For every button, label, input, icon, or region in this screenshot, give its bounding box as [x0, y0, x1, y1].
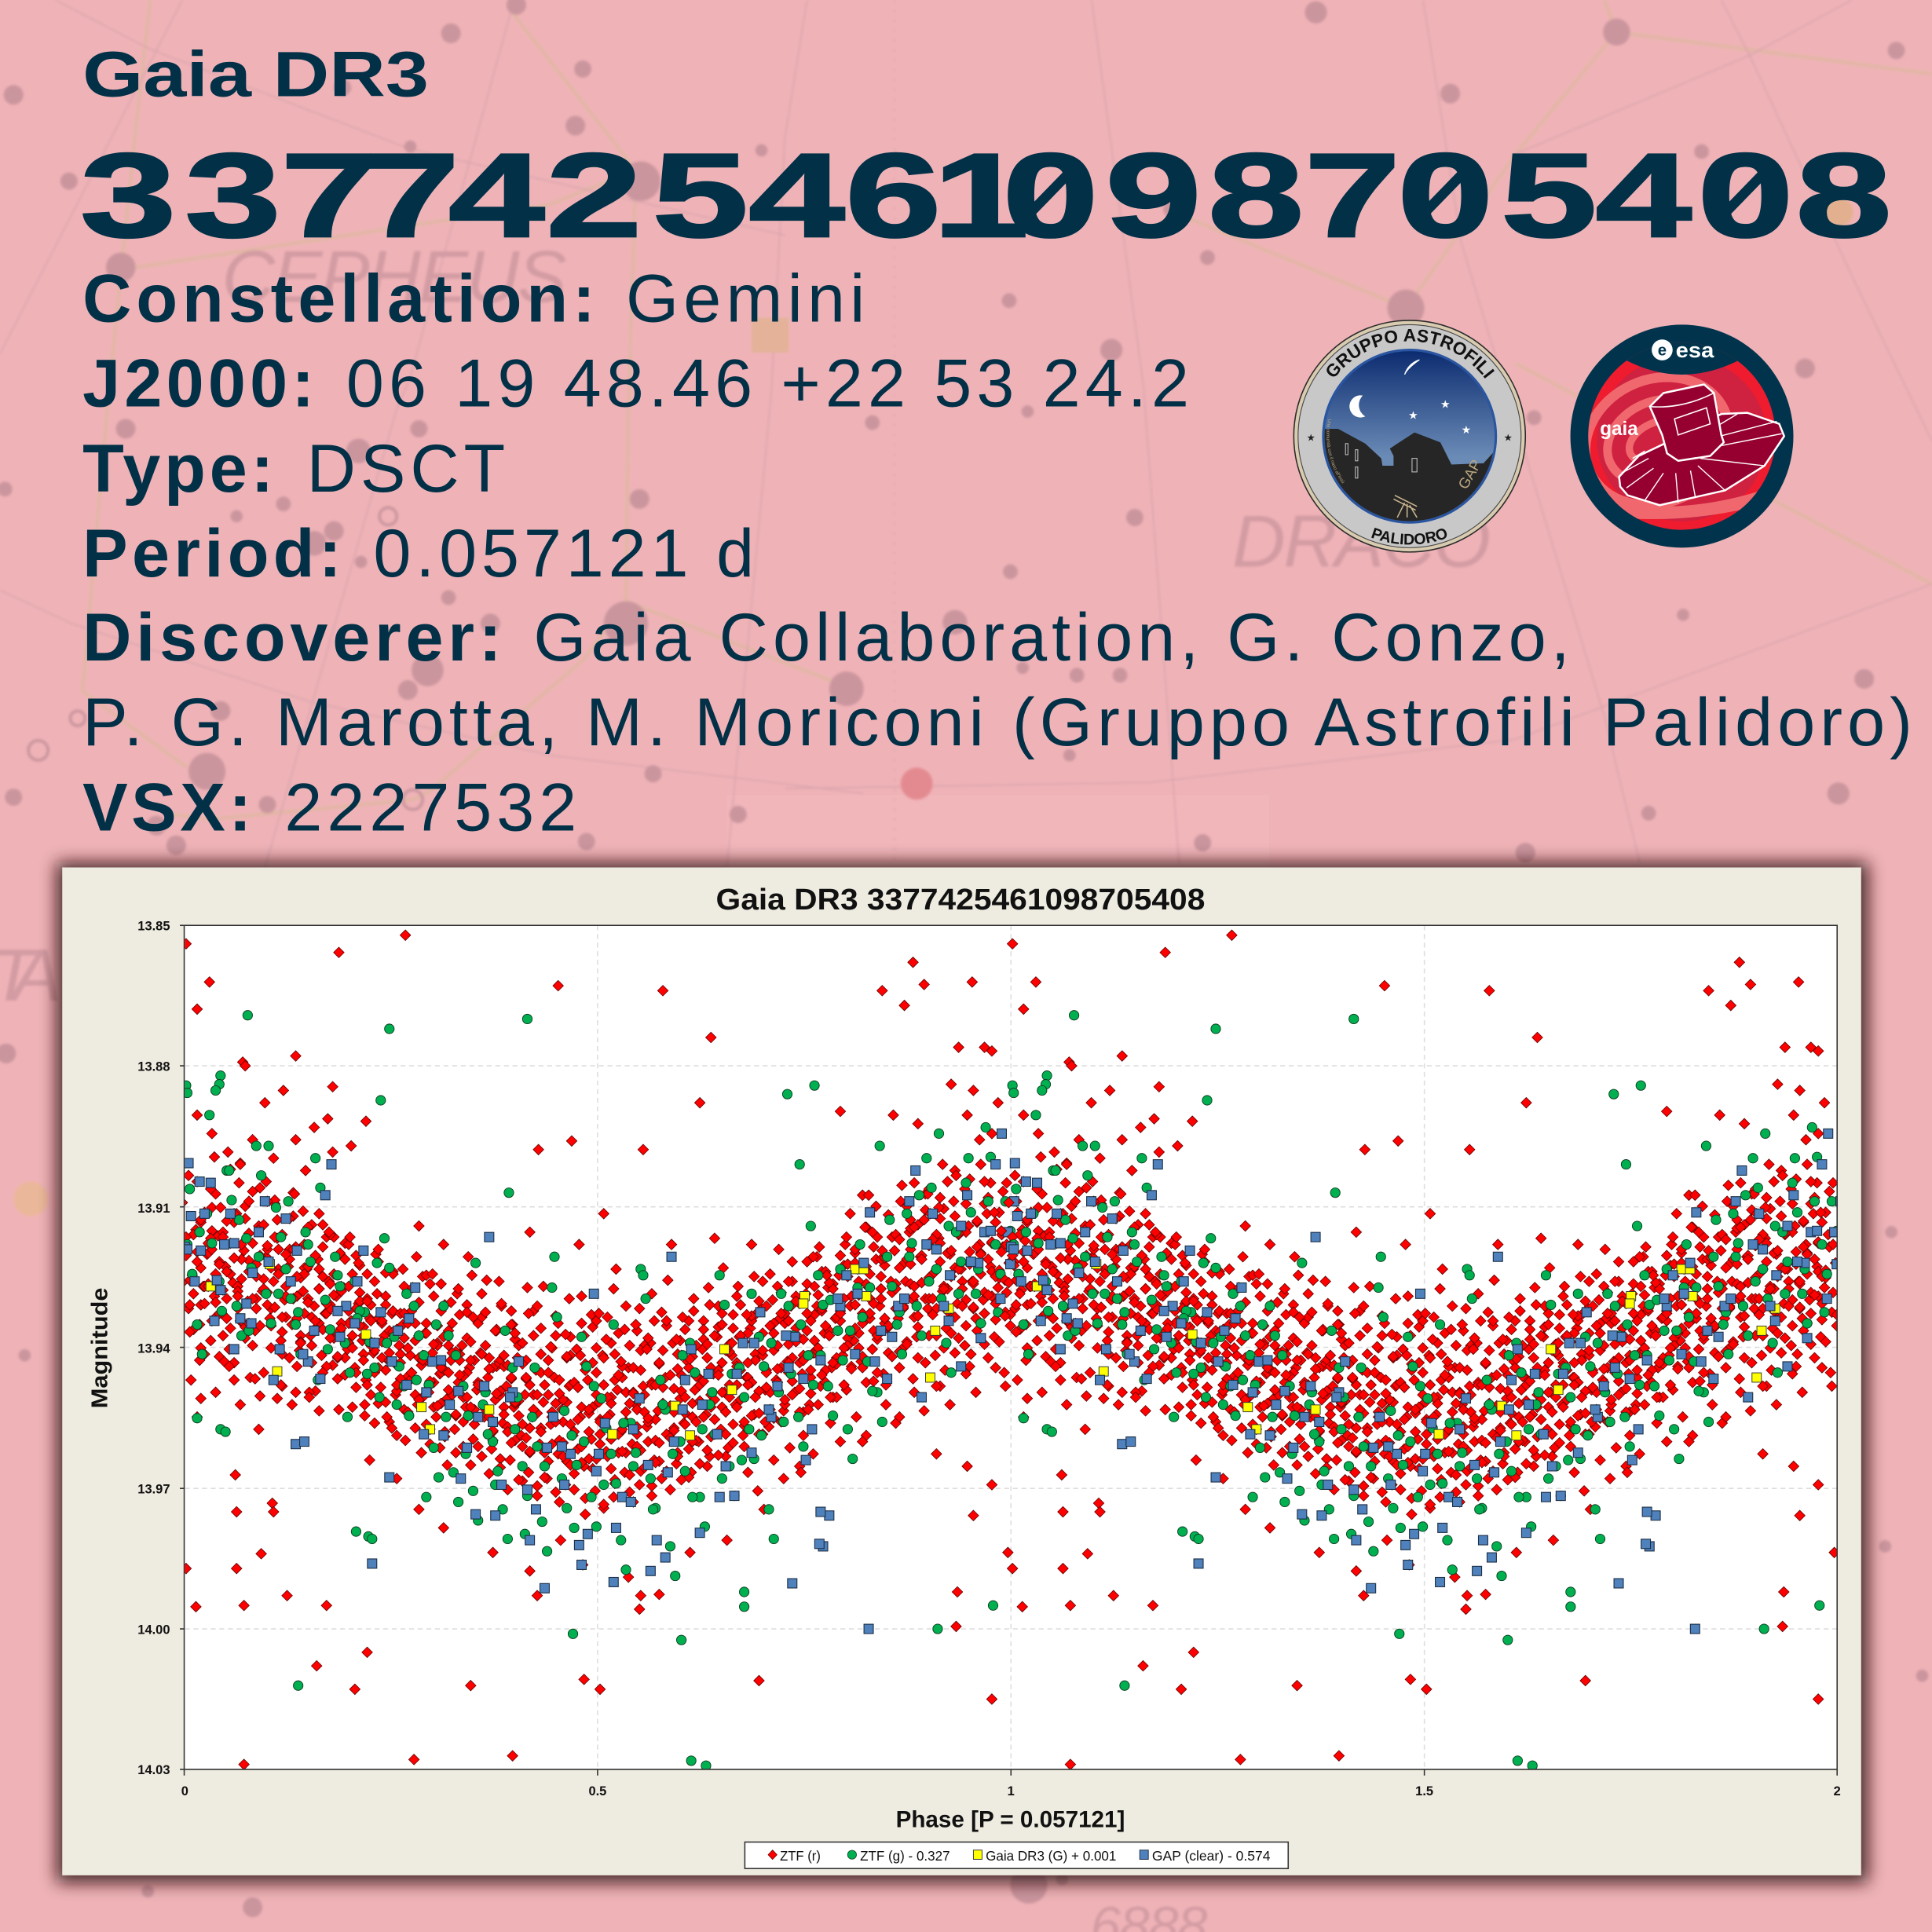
background: star chart: DRACO [1232, 500, 1491, 583]
panel: chart shadow [57, 862, 1868, 1883]
x axis labels: 0.5 [588, 1784, 606, 1798]
text: constellation: Gemini [626, 261, 865, 336]
text: J2000: J2000: [82, 346, 314, 422]
panel: phase plot chart [62, 867, 1861, 1875]
legend: Gaia DR3 (G) + 0.001 [986, 1848, 1116, 1864]
logo: Gruppo Astrofili Palidoro [1293, 320, 1527, 553]
text: VSX: 2227532 [284, 770, 576, 845]
heading: source id: 3377425461098705408 [80, 129, 1892, 262]
text: period: 0.057121 d [373, 516, 754, 591]
logo: Gruppo Astrofili Palidoro: ★ [1462, 423, 1471, 436]
text: type: Type: [82, 431, 273, 507]
heading: Gaia DR3: Gaia DR3 [82, 38, 429, 110]
background: star chart: CEPHEUS [221, 235, 567, 317]
y axis labels: 14.03 [137, 1763, 170, 1777]
x axis labels: 2 [1834, 1784, 1841, 1798]
y axis title: Magnitude [86, 1287, 112, 1408]
x axis labels: 1 [1008, 1784, 1015, 1798]
logo: Gruppo Astrofili Palidoro: Una comunità con il naso all'insù [1326, 419, 1345, 484]
text: period: Period: [82, 516, 342, 591]
text: J2000: 06 19 48.46 +22 53 24.2 [346, 346, 1189, 422]
text: discoverer: Gaia Collaboration, G. Conzo, [533, 600, 1570, 675]
data points: four photometric series, two phase cycles [175, 925, 1852, 1769]
plot frame and ticks [180, 925, 1837, 1776]
x axis labels: 0 [181, 1784, 188, 1798]
x axis labels: 1.5 [1415, 1784, 1433, 1798]
text: constellation [82, 261, 865, 336]
chart title: Gaia DR3 3377425461098705408 [716, 883, 1205, 916]
logo: ESA Gaia [1564, 324, 1794, 547]
text: discoverer line 2: P. G. Marotta, M. Moriconi (Gruppo Astrofili Palidoro) [82, 685, 1912, 760]
logo: Gruppo Astrofili Palidoro: GAP [1454, 457, 1484, 492]
logo: Gruppo Astrofili Palidoro: ★ [1408, 408, 1418, 421]
logo: ESA Gaia: gaia [1600, 418, 1639, 440]
legend: ZTF (r) [780, 1848, 821, 1864]
x axis title: Phase [P = 0.057121] [896, 1807, 1125, 1833]
text: discoverer [82, 600, 1570, 675]
text: VSX [82, 770, 576, 845]
logo: Gruppo Astrofili Palidoro: GRUPPO ASTROFILI [1326, 329, 1495, 379]
logo: Gruppo Astrofili Palidoro: ★ [1307, 433, 1315, 444]
plot area [185, 925, 1837, 1769]
logo: Gruppo Astrofili Palidoro: ★ [1440, 397, 1451, 410]
logo: ESA Gaia: e [1658, 342, 1667, 360]
text: type: DSCT [307, 431, 505, 507]
logo: Gruppo Astrofili Palidoro: PALIDORO [1371, 528, 1447, 545]
y axis labels: 13.94 [137, 1342, 170, 1356]
y axis labels: 13.85 [137, 920, 170, 934]
text: VSX: VSX: [82, 770, 251, 845]
legend: GAP (clear) - 0.574 [1152, 1848, 1271, 1864]
y axis labels: 13.91 [137, 1202, 170, 1216]
text: constellation: Constellation: [82, 261, 595, 336]
logo: ESA Gaia: esa [1676, 338, 1714, 362]
y axis labels: 13.88 [137, 1059, 170, 1074]
y axis labels: 14.00 [137, 1623, 170, 1637]
y axis labels: 13.97 [137, 1482, 170, 1496]
legend [745, 1842, 1288, 1868]
x axis labels [181, 1784, 1841, 1798]
legend: ZTF (g) - 0.327 [860, 1848, 950, 1864]
text: discoverer: Discoverer: [82, 600, 502, 675]
text: period [82, 516, 754, 591]
y axis labels [137, 920, 170, 1777]
text: type [82, 431, 505, 507]
logo: Gruppo Astrofili Palidoro: ★ [1504, 433, 1513, 444]
